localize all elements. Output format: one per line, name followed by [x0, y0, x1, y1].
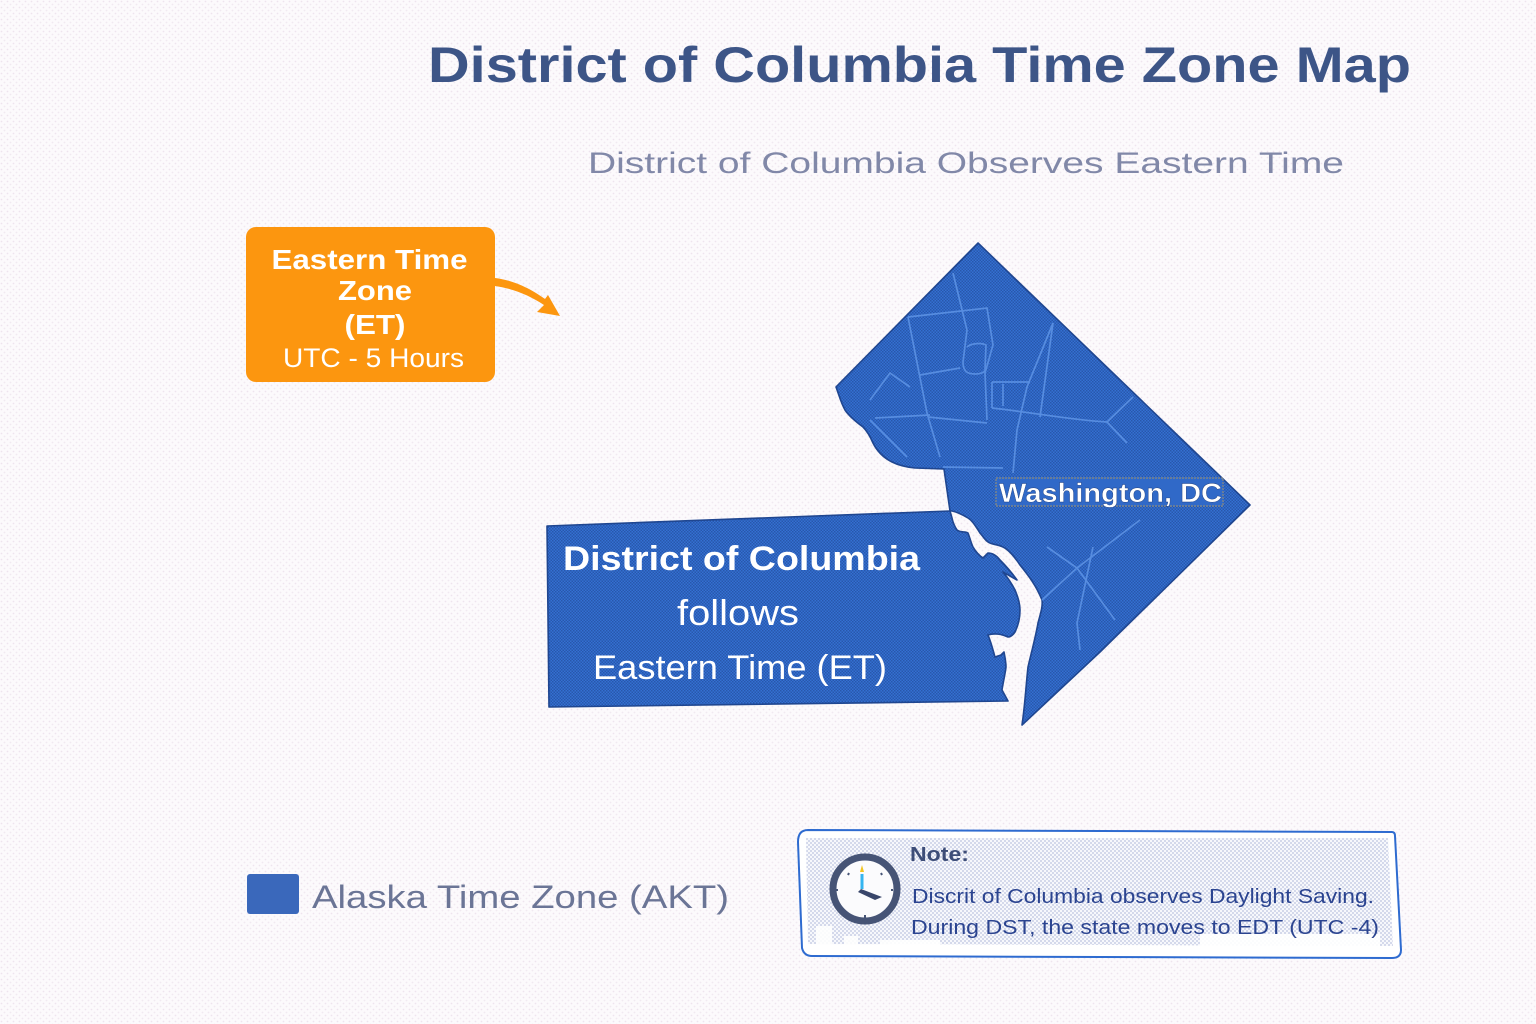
- map: street lines: [870, 273, 1140, 650]
- note heading: Note:: [910, 844, 969, 866]
- map label: District of Columbia follows Eastern Time: follows: [677, 592, 799, 633]
- callout heading: Eastern Time: [272, 244, 468, 275]
- callout heading: (ET): [344, 309, 406, 340]
- arrow: callout to map: [495, 278, 560, 316]
- note text: Discrit of Columbia observes Daylight Saving.: [912, 885, 1374, 908]
- callout box: [246, 227, 495, 382]
- map: District of Columbia: [547, 243, 1250, 725]
- subtitle: District of Columbia Observes Eastern Time: [588, 147, 1344, 180]
- map label: District of Columbia follows Eastern Time: [563, 540, 921, 687]
- title: District of Columbia Time Zone Map: [428, 37, 1411, 93]
- legend: [247, 874, 729, 915]
- note text: During DST, the state moves to EDT (UTC -4): [911, 916, 1379, 939]
- note fade at lower edge: [816, 926, 1380, 950]
- icon: clock: [833, 857, 897, 921]
- note text: [911, 885, 1379, 939]
- map: north-east section: [836, 243, 1250, 725]
- map label: District of Columbia follows Eastern Time: District of Columbia: [563, 540, 921, 578]
- note dotted fill: [806, 838, 1393, 946]
- callout: Eastern Time Zone: [246, 227, 495, 382]
- note panel: [798, 830, 1401, 958]
- note box: [798, 830, 1401, 958]
- legend swatch: [247, 874, 299, 914]
- callout UTC offset: UTC - 5 Hours: [283, 343, 464, 373]
- legend label: Alaska Time Zone (AKT): [312, 879, 729, 915]
- map label: District of Columbia follows Eastern Time: Eastern Time (ET): [593, 649, 887, 687]
- map: south-west section: [547, 511, 1020, 707]
- callout heading: Zone: [338, 275, 412, 306]
- map label: Washington, DC: Washington, DC: [999, 478, 1222, 508]
